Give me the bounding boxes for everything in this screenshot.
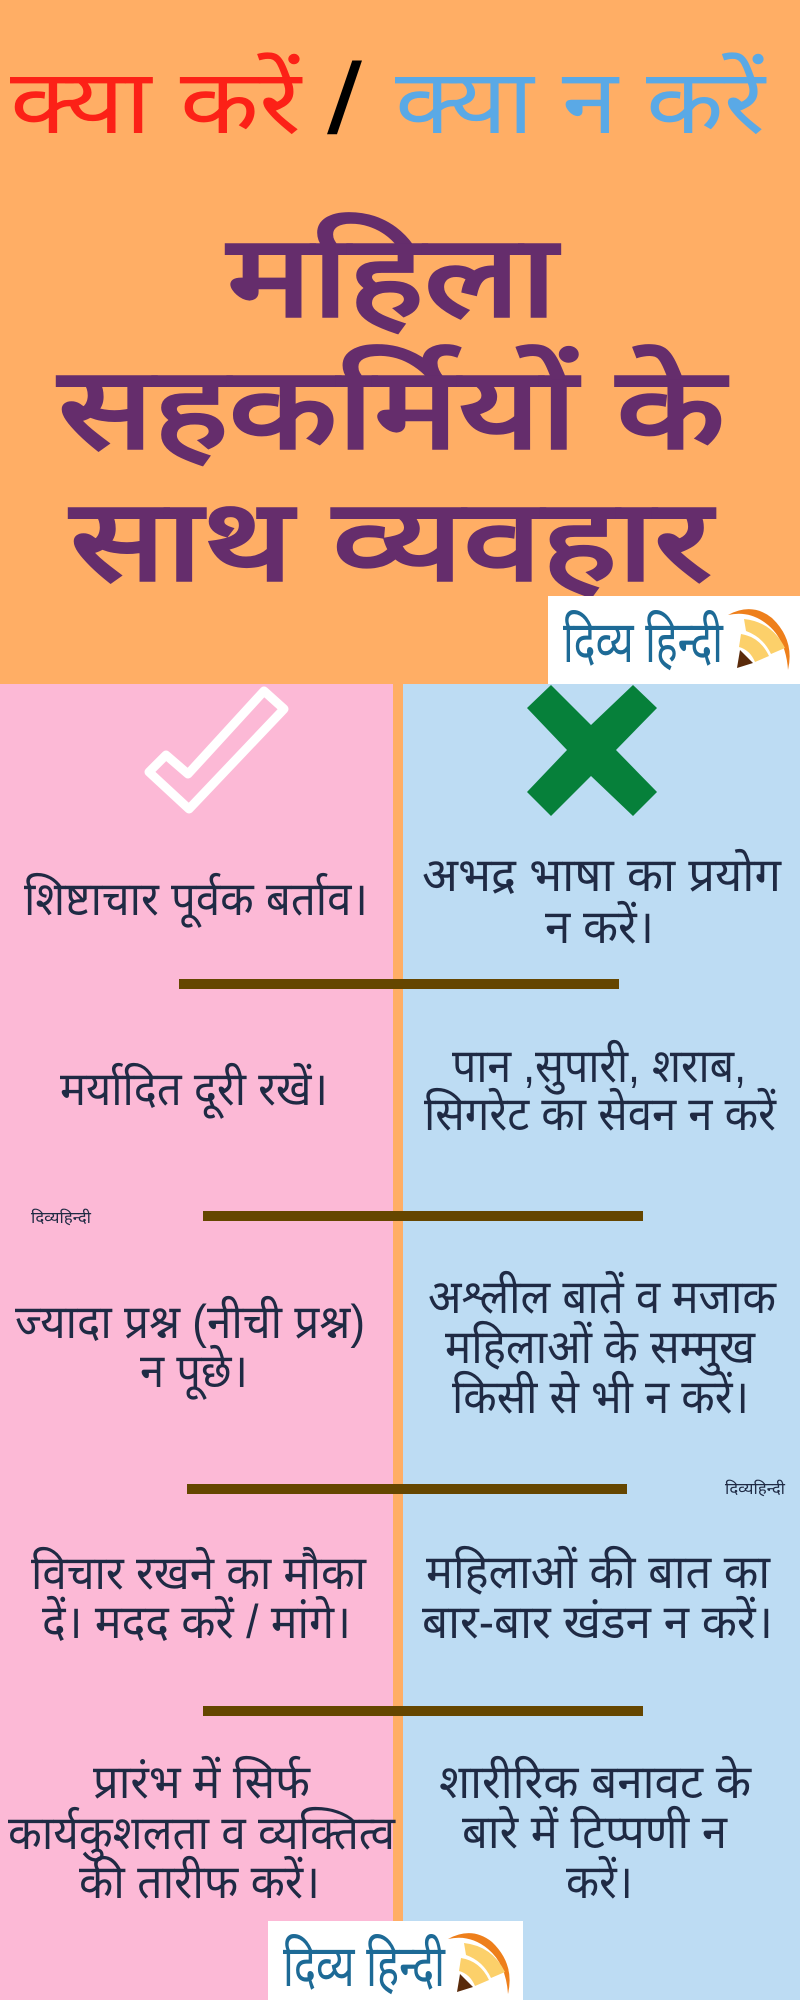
heading: do / do not: क्या न करें	[395, 52, 767, 153]
heading: do / do not: क्या करें	[10, 52, 303, 153]
row 3 left	[15, 1295, 365, 1400]
icon: check mark	[149, 691, 284, 809]
watermark right: दिव्यहिन्दी	[725, 1479, 786, 1498]
title	[56, 212, 730, 605]
row 5 left: कार्यकुशलता व व्यक्तित्व	[8, 1806, 396, 1862]
panel: do not (right column)	[403, 684, 800, 2000]
row 5 left: की तारीफ करें।	[79, 1855, 320, 1908]
watermark left: दिव्यहिन्दी	[31, 1208, 92, 1227]
title: महिला	[225, 212, 561, 341]
logo: bottom centre: दिव्य हिन्दी	[283, 1934, 446, 1999]
title: साथ व्यवहार	[68, 478, 717, 605]
divider 1	[179, 979, 619, 989]
row 2 right: पान ,सुपारी, शराब,	[452, 1039, 746, 1095]
row 1 left: शिष्टाचार पूर्वक बर्ताव।	[24, 872, 368, 928]
row 3 right: अश्लील बातें व मजाक	[428, 1270, 777, 1323]
row 4 left	[31, 1546, 367, 1648]
row 3 right: महिलाओं के सम्मुख	[445, 1320, 756, 1376]
divider 2	[203, 1211, 643, 1221]
row 1 right: अभद्र भाषा का प्रयोग	[422, 848, 783, 901]
row 4 left: विचार रखने का मौका	[31, 1546, 367, 1599]
divider 3	[187, 1484, 627, 1494]
row 2 right	[424, 1039, 777, 1140]
row 3 right	[428, 1270, 777, 1423]
row 1 right: न करें।	[545, 900, 654, 953]
row 5 right: शारीरिक बनावट के	[439, 1755, 752, 1808]
heading: do / do not: /	[327, 43, 362, 155]
title: सहकर्मियों के	[56, 344, 730, 473]
row 2 left: मर्यादित दूरी रखें।	[60, 1062, 328, 1119]
row 4 right: बार-बार खंडन न करें।	[422, 1595, 773, 1648]
heading: do / do not	[10, 43, 767, 155]
panel: do (left column)	[0, 684, 393, 2000]
row 4 left: दें। मदद करें / मांगे।	[42, 1595, 351, 1648]
row 3 left: ज्यादा प्रश्न (नीची प्रश्न)	[15, 1295, 365, 1348]
row 3 left: न पूछे।	[140, 1344, 248, 1400]
logo: top right: दिव्य हिन्दी	[563, 610, 724, 675]
row 5 right: बारे में टिप्पणी न	[462, 1805, 728, 1858]
row 1 right	[422, 848, 783, 953]
icon: cross	[527, 685, 657, 816]
row 5 left: प्रारंभ में सिर्फ	[93, 1755, 311, 1808]
row 3 right: किसी से भी न करें।	[452, 1370, 749, 1423]
row 2 right: सिगरेट का सेवन न करें	[424, 1087, 777, 1140]
row 4 right: महिलाओं की बात का	[426, 1545, 771, 1598]
row 4 right	[422, 1545, 773, 1648]
row 5 left	[8, 1755, 396, 1908]
row 5 right: करें।	[566, 1855, 633, 1908]
divider 4	[203, 1706, 643, 1716]
logo: top right	[548, 596, 800, 684]
row 5 right	[439, 1755, 752, 1908]
